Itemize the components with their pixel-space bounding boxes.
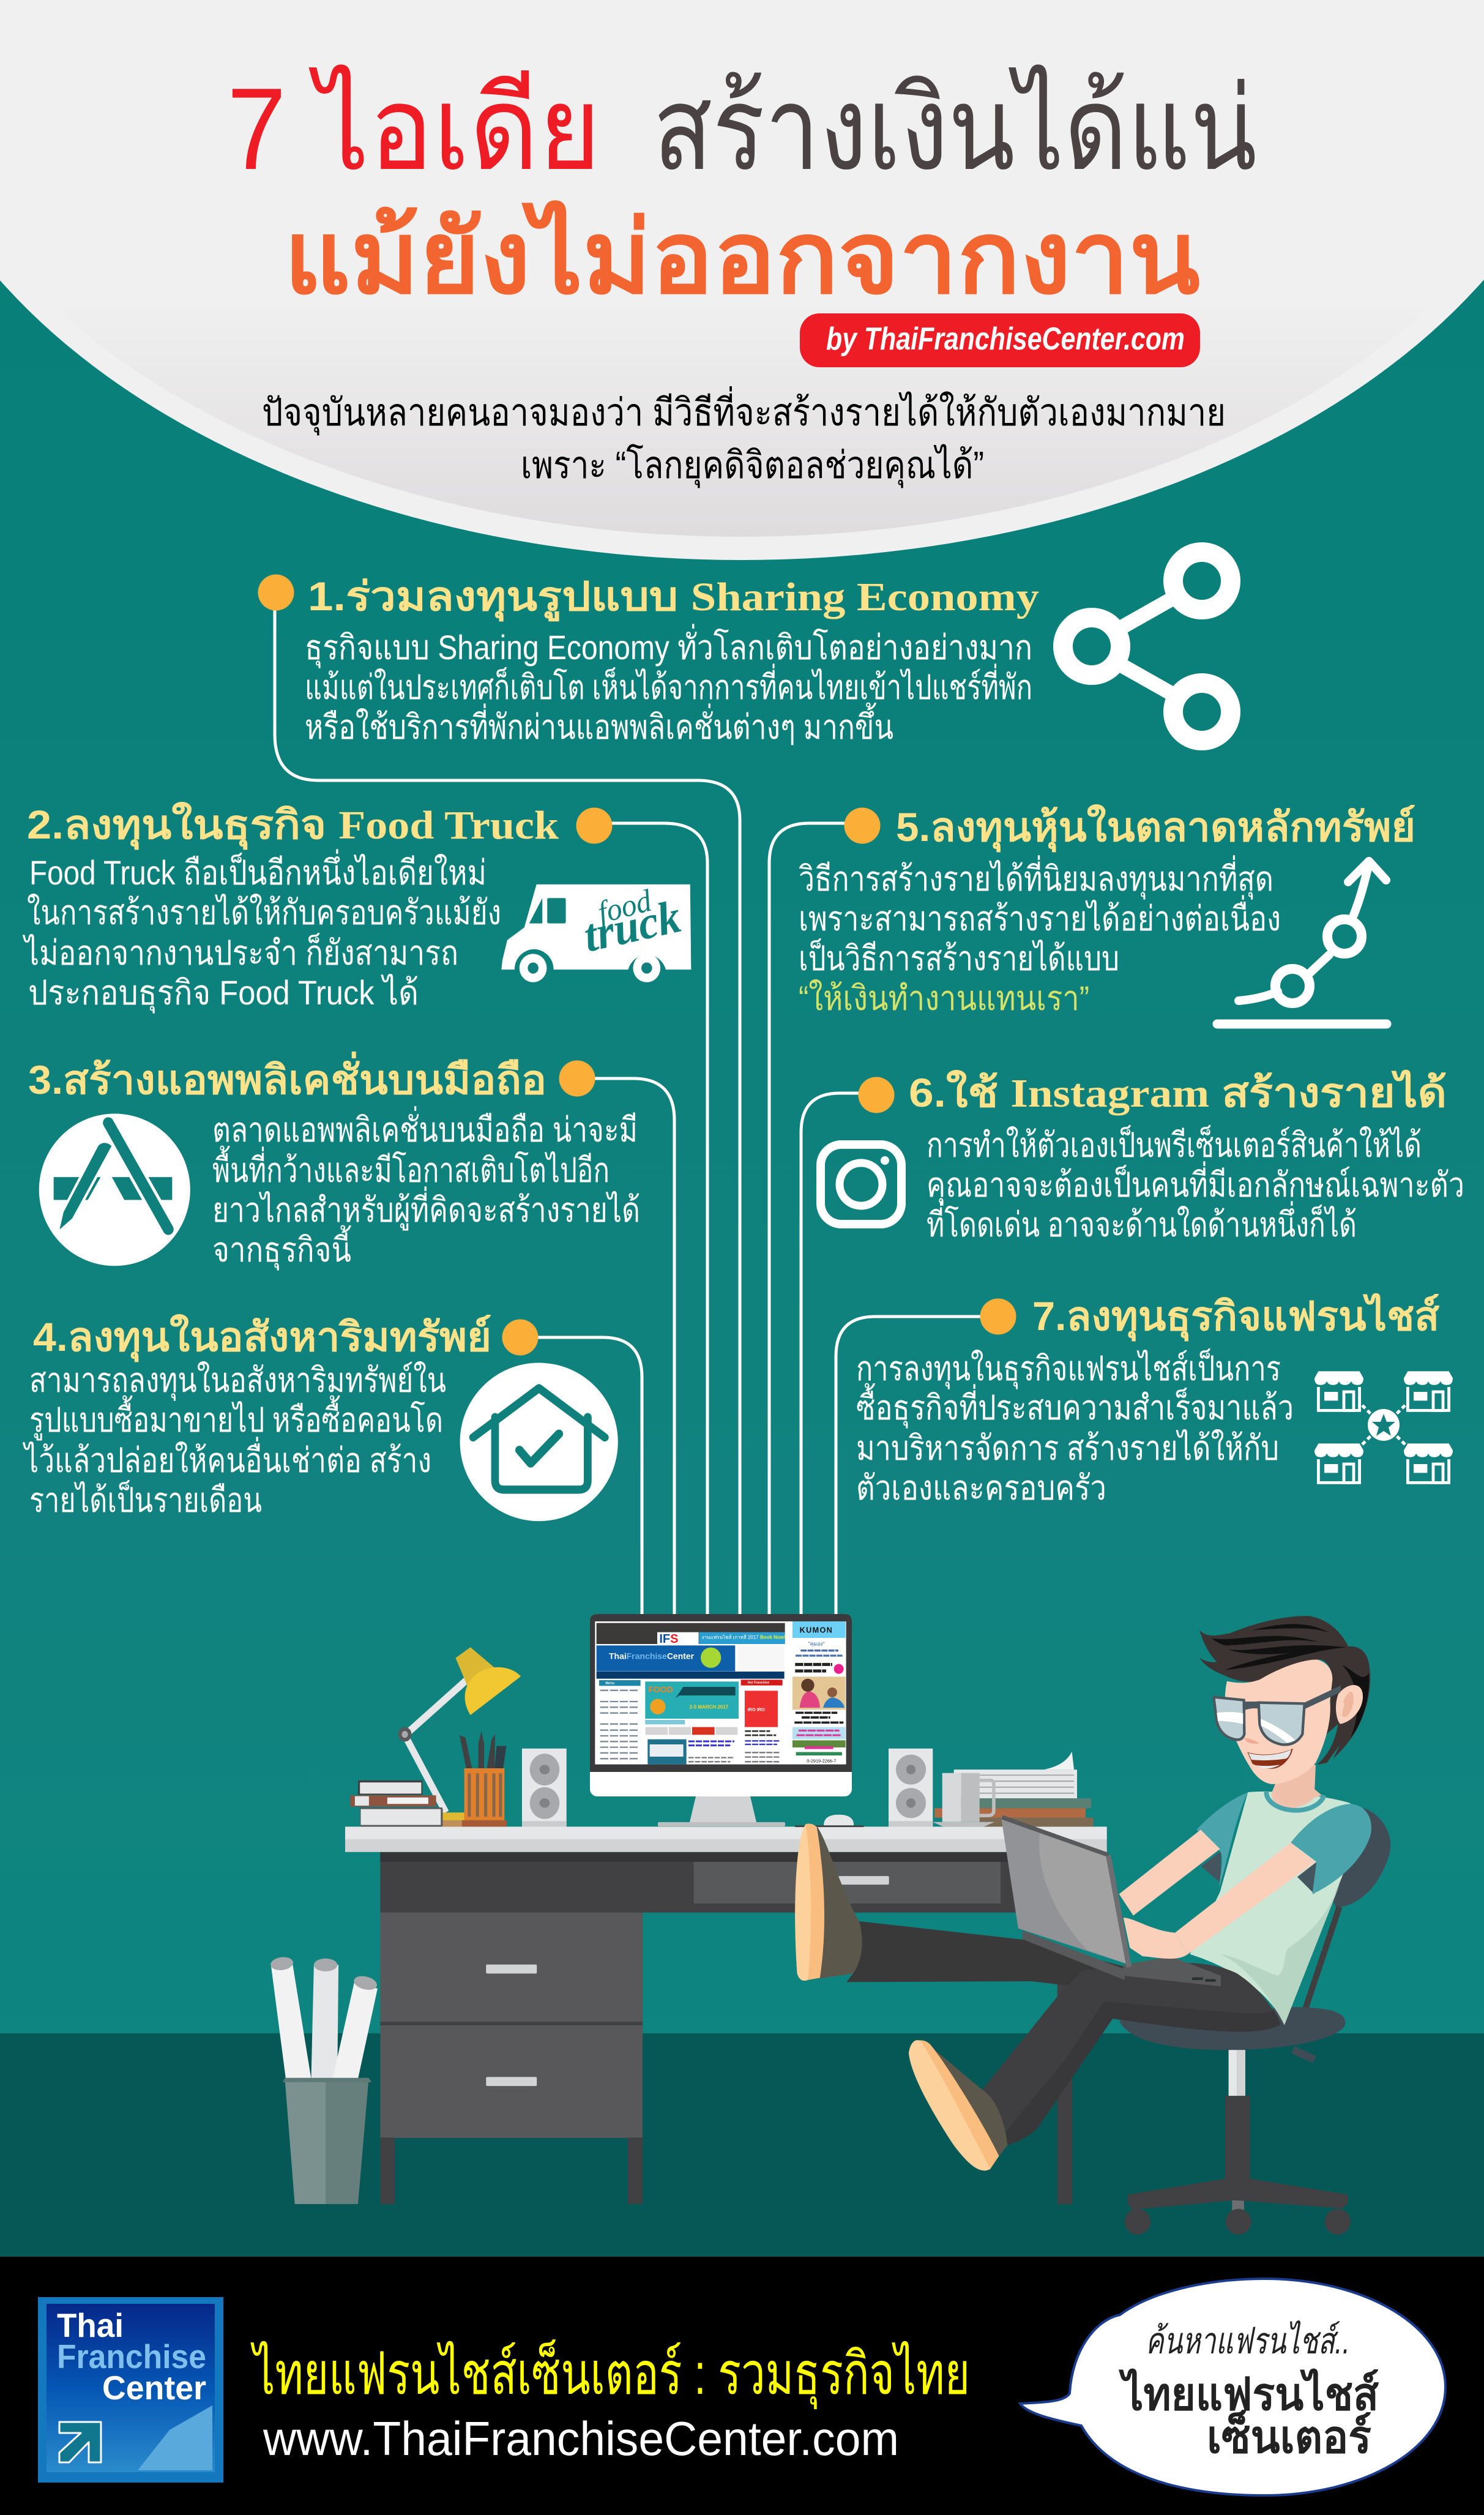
desk [345,1826,1107,2204]
heading 1: 1.ร่วมลงทุนรูปแบบ Sharing Economy [308,574,1039,622]
desk scene [270,1647,1107,2204]
mouth [1247,1749,1293,1769]
body 6 [927,1124,1464,1244]
body [795,1763,1371,2170]
body 4: รูปแบบซื้อมาขายไป หรือซื้อคอนโด [29,1396,443,1441]
nose [1244,1738,1259,1744]
title: สร้างเงินได้แน่ [653,64,1257,194]
lamp [398,1647,521,1826]
website screenshot: งานแฟรนไชส์ เกาหลี 2017 Book Now! [702,1634,786,1640]
by-line badge: by ThaiFranchiseCenter.com [826,321,1185,357]
body 3: ตลาดแอพพลิเคชั่นบนมือถือ น่าจะมี [212,1106,638,1149]
title [227,64,1257,194]
far shoe [795,1823,862,1981]
icon: share [1063,552,1231,741]
body 7 [856,1348,1294,1507]
item 5: stocks [799,803,1415,1024]
book and paper stack [934,1752,1094,1826]
footer logo [38,2297,223,2483]
bin with paper rolls [270,1956,378,2204]
footer logo: Center [102,2369,206,2407]
footer logo: Franchise [57,2337,206,2375]
header dome [0,0,1484,560]
website screenshot [595,1621,846,1765]
body 3: จากธุรกิจนี้ [212,1225,351,1271]
speech bubble: เซ็นเตอร์ [1207,2410,1371,2462]
chair [1057,1808,1390,2235]
by-line badge [800,313,1200,367]
body 3: ยาวไกลสำหรับผู้ที่คิดจะสร้างรายได้ [212,1186,640,1231]
character [795,1616,1390,2235]
laptop base [1124,1956,1221,1986]
icon: food truck [501,883,691,982]
body 2: Food Truck ถือเป็นอีกหนึ่งไอเดียใหม่ [29,849,487,892]
pen holder [460,1731,507,1826]
heading 5: 5.ลงทุนหุ้นในตลาดหลักทรัพย์ [896,803,1415,853]
body 4: ไว้แล้วปล่อยให้คนอื่นเช่าต่อ สร้าง [23,1437,431,1479]
body 3 [212,1106,640,1271]
connector lines [275,592,998,1616]
intro text [262,386,1226,488]
bullet 7 [980,1299,1016,1334]
body 7: มาบริหารจัดการ สร้างรายได้ให้กับ [856,1429,1279,1467]
body 4 [23,1361,446,1519]
website screenshot: 0-2919-2266-7 [807,1758,836,1763]
left speaker [522,1749,567,1826]
sleeves [1196,1792,1371,1894]
body 5 [799,855,1281,1017]
desk items on right [795,1749,1094,1827]
item 3: mobile app [28,1051,640,1271]
body 3: พื้นที่กว้างและมีโอกาสเติบโตไปอีก [212,1146,610,1189]
icon: food truck: truck [580,891,685,962]
icon: franchise network [1314,1371,1453,1482]
heading 7: 7.ลงทุนธุรกิจแฟรนไชส์ [1032,1293,1440,1342]
body 6: ที่โดดเด่น อาจจะด้านใดด้านหนึ่งก็ได้ [927,1201,1357,1244]
heading 3: 3.สร้างแอพพลิเคชั่นบนมือถือ [28,1051,546,1102]
body 7: การลงทุนในธุรกิจแฟรนไชส์เป็นการ [856,1348,1281,1389]
bullet 5 [845,808,880,843]
body 1: หรือใช้บริการที่พักผ่านแอพพลิเคชั่นต่างๆ มากขึ้น [305,703,893,746]
footer logo: Thai [57,2306,124,2344]
body 1: แม้แต่ในประเทศก็เติบโต เห็นได้จากการที่คนไทยเข้าไปแชร์ที่พัก [305,663,1032,706]
mug [933,1773,994,1826]
website screenshot: Hot Franchise [748,1681,769,1684]
item 2: food truck [23,801,691,1014]
body 1: ธุรกิจแบบ Sharing Economy ทั่วโลกเติบโตอย่างอย่างมาก [305,624,1032,668]
icon: growth chart [1217,861,1387,1024]
website screenshot: KUMON [800,1626,833,1634]
body 2: ไม่ออกจากงานประจำ ก็ยังสามารถ [23,932,458,972]
near leg [982,1963,1280,2145]
mouse [795,1815,863,1827]
speech bubble: ค้นหาแฟรนไชส์.. [1146,2320,1350,2361]
body 2 [23,849,501,1014]
body 5: เพราะสามารถสร้างรายได้อย่างต่อเนื่อง [799,895,1281,938]
body 7: ซื้อธุรกิจที่ประสบความสำเร็จมาแล้ว [856,1383,1294,1429]
right speaker [889,1749,933,1826]
heading 6: 6.ใช้ Instagram สร้างรายได้ [909,1069,1447,1116]
item 1: sharing economy [258,552,1231,746]
intro text: ปัจจุบันหลายคนอาจมองว่า มีวิธีที่จะสร้างรายได้ให้กับตัวเองมากมาย [262,386,1226,435]
shirt [1190,1792,1357,2025]
website screenshot: ThaiFranchiseCenter [609,1651,695,1661]
website screenshot: IFS [659,1632,678,1646]
body 2: ประกอบธุรกิจ Food Truck ได้ [28,973,419,1014]
speech bubble [1020,2279,1445,2495]
body 4: รายได้เป็นรายเดือน [29,1479,262,1519]
body 5: “ให้เงินทำงานแทนเรา” [799,979,1089,1017]
website screenshot: Menu [605,1681,615,1685]
icon: app store [39,1114,190,1266]
bullet 3 [559,1060,595,1097]
icon: food truck: food [594,883,655,930]
website screenshot: "คุมอง" [808,1641,825,1648]
far leg [846,1921,1134,1986]
head [1199,1616,1370,1806]
glasses [1214,1685,1341,1744]
body 5: เป็นวิธีการสร้างรายได้แบบ [799,938,1119,977]
body 4: สามารถลงทุนในอสังหาริมทรัพย์ใน [29,1361,446,1401]
website screenshot: 2-5 MARCH 2017 [690,1705,729,1710]
icon: instagram [821,1145,901,1224]
intro text: เพราะ “โลกยุคดิจิตอลช่วยคุณได้” [521,444,984,488]
near shoe [909,2040,1007,2170]
body 5: วิธีการสร้างรายได้ที่นิยมลงทุนมากที่สุด [799,855,1273,900]
subtitle: แม้ยังไม่ออกจากงาน [284,200,1200,314]
neck [1272,1763,1315,1808]
body 2: ในการสร้างรายได้ให้กับครอบครัวแม้ยัง [27,893,501,932]
heading 4: 4.ลงทุนในอสังหาริมทรัพย์ [33,1313,491,1362]
laptop screen [1001,1817,1130,1980]
monitor [590,1614,852,1826]
body 1 [305,624,1032,746]
footer text: ไทยแฟรนไชส์เซ็นเตอร์ : รวมธุรกิจไทย [250,2339,970,2410]
books [350,1781,442,1826]
bullet 2 [576,808,612,843]
item 7: franchise [856,1293,1453,1507]
speech bubble: ไทยแฟรนไชส์ [1119,2367,1379,2420]
website screenshot: IRO IRO [748,1706,765,1712]
title: 7 ไอเดีย [227,64,601,194]
arms and hands [1119,1829,1315,1959]
heading 2: 2.ลงทุนในธุรกิจ Food Truck [27,801,559,850]
bullet 1 [258,574,294,611]
footer text [250,2339,970,2465]
website screenshot: FOOD [648,1684,673,1694]
item 4: real estate [23,1313,618,1521]
floor [0,2033,1484,2257]
icon: house [460,1363,618,1521]
body 7: ตัวเองและครอบครัว [856,1468,1106,1507]
item 6: instagram [821,1069,1464,1244]
bullet 4 [502,1320,539,1355]
bullet 6 [858,1077,895,1113]
footer text: www.ThaiFranchiseCenter.com [263,2412,899,2465]
footer band [0,2257,1484,2515]
